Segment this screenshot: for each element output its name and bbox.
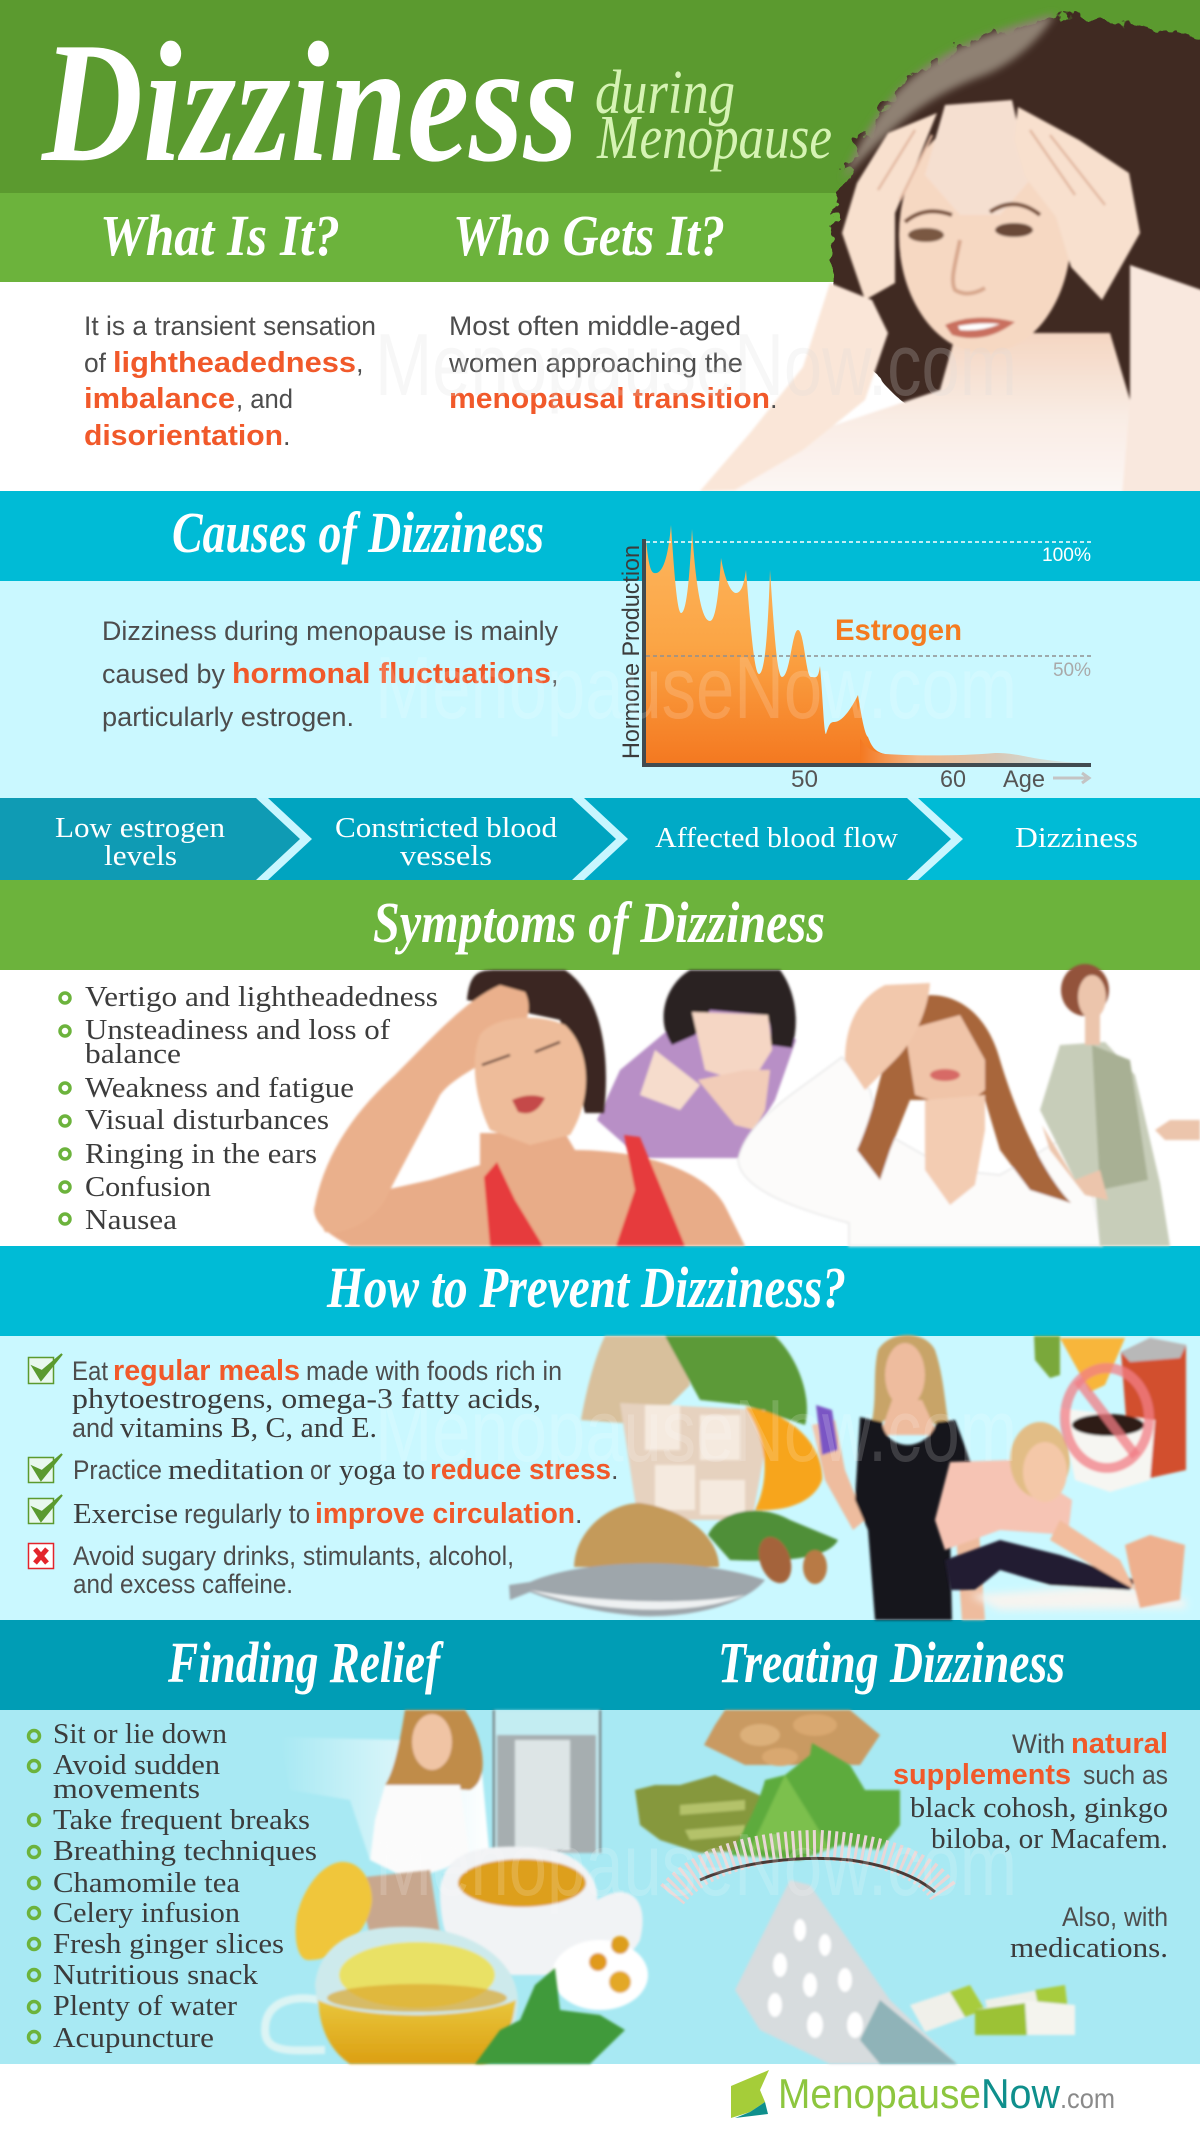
list: prevention: yoga (339, 1454, 396, 1486)
photo: ginger (296, 1862, 444, 1960)
photo: tan supplement tablets (704, 1710, 880, 1766)
logo: Menopause (778, 2070, 981, 2117)
list: finding relief: Acupuncture (53, 2022, 214, 2054)
list: finding relief: Fresh ginger slices (53, 1928, 284, 1960)
text block: treatment: Also, with (1062, 1902, 1168, 1932)
photo: parsley herb (475, 1968, 625, 2064)
photo: blister pack of pills (735, 1880, 957, 2064)
title: during (595, 59, 735, 127)
photo: white cup of tea (440, 1847, 643, 1975)
photo: woman resting in bed (280, 1710, 490, 1880)
list: symptoms: Unsteadiness and loss of (85, 1014, 390, 1046)
chart: estrogen decline (618, 525, 1091, 793)
list: prevention: to (403, 1455, 425, 1485)
text block: who gets it: menopausal transition (449, 383, 770, 415)
photo: woman with raised hand in white shirt (738, 983, 1102, 1246)
list: prevention: reduce stress (430, 1454, 611, 1486)
text block: what is it: , (356, 348, 364, 378)
watermark: MenopauseNow.com (375, 315, 1017, 414)
photo: drinks with prohibition sign (1034, 1336, 1186, 1492)
text block: who gets it (448, 311, 778, 415)
text block: who gets it: women approaching the (448, 348, 743, 378)
list: prevention (28, 1354, 619, 1599)
list: symptoms: Confusion (85, 1171, 212, 1203)
watermark: MenopauseNow.com (375, 1381, 1017, 1480)
text block: causes: Dizziness during menopause is mainly (102, 616, 558, 646)
list: prevention: and (72, 1413, 114, 1443)
photo: chamomile flowers (552, 1936, 648, 2010)
list: finding relief: Avoid sudden (53, 1749, 221, 1781)
chart: estrogen decline: 100% (1042, 545, 1091, 566)
list: prevention: improve circulation (315, 1498, 575, 1530)
list: symptoms: Ringing in the ears (85, 1138, 317, 1170)
text block: who gets it: . (770, 384, 778, 414)
list: finding relief: Breathing techniques (53, 1835, 317, 1867)
text block: causes: particularly estrogen. (102, 702, 354, 732)
text block: what is it: imbalance (84, 383, 235, 415)
text block: treatment (893, 1728, 1168, 1964)
text block: who gets it: Most often middle-aged (449, 311, 741, 341)
text block: treatment: biloba, or Macafem. (931, 1823, 1168, 1855)
text block: causes (102, 616, 559, 732)
photo: glass mug of herbal tea (265, 1927, 518, 2064)
list: finding relief: Nutritious snack (53, 1959, 259, 1991)
chart: estrogen decline: Estrogen (835, 614, 962, 647)
list: prevention: or (310, 1455, 331, 1485)
watermark: MenopauseNow.com (375, 638, 1017, 737)
text block: causes: , (551, 659, 559, 689)
chart: estrogen decline: 50% (1053, 660, 1091, 681)
list: symptoms: Nausea (85, 1204, 177, 1236)
text block: what is it: lightheadedness (113, 347, 356, 379)
text block: what is it: . (283, 421, 291, 451)
list: prevention: regularly to (184, 1499, 310, 1529)
list: prevention: Avoid sugary drinks, stimulants, alcohol, (73, 1541, 514, 1571)
list: prevention: meditation (168, 1454, 305, 1486)
list: finding relief: Plenty of water (53, 1990, 237, 2022)
list: prevention: regular meals (113, 1355, 300, 1387)
photo: glass of water (493, 1710, 600, 1853)
list: finding relief: movements (53, 1773, 200, 1805)
photo: woman in purple (597, 970, 796, 1158)
list: finding relief: Take frequent breaks (53, 1804, 310, 1836)
list: finding relief: Celery infusion (53, 1897, 241, 1929)
photo: woman with hand on forehead in red top (314, 970, 745, 1246)
logo (731, 2070, 1115, 2118)
photo: green capsules (635, 1775, 770, 1853)
text block: treatment: black cohosh, ginkgo (910, 1792, 1168, 1824)
photo: black cohosh flower (672, 1845, 945, 1895)
list: prevention: . (611, 1455, 619, 1485)
list: finding relief: Chamomile tea (53, 1867, 240, 1899)
process arrows: low estrogen to dizziness: Dizziness (1015, 823, 1138, 854)
photo: healthy foods (509, 1336, 838, 1616)
heading: finding relief: Finding Relief (167, 1630, 444, 1695)
text block: what is it: disorientation (84, 420, 283, 452)
text block: what is it (84, 311, 376, 452)
text block: causes: hormonal fluctuations (232, 658, 551, 690)
list: prevention: Practice (73, 1455, 162, 1485)
list: finding relief: Sit or lie down (53, 1718, 227, 1750)
list: finding relief (28, 1718, 317, 2054)
list: symptoms: Vertigo and lightheadedness (85, 981, 438, 1013)
logo: Now (981, 2070, 1061, 2117)
process arrows: low estrogen to dizziness: levels (104, 841, 177, 872)
list: symptoms: Visual disturbances (85, 1104, 329, 1136)
list: symptoms (60, 981, 438, 1236)
list: prevention: Exercise (73, 1498, 178, 1530)
chart: estrogen decline: Age (1003, 766, 1045, 793)
photo: woman stretching (935, 1422, 1186, 1610)
heading: prevent: How to Prevent Dizziness? (326, 1255, 846, 1320)
chart: estrogen decline: Hormone Production (618, 545, 645, 759)
list: prevention: made with foods rich in (306, 1356, 562, 1386)
list: symptoms: balance (85, 1038, 181, 1070)
heading: causes: Causes of Dizziness (172, 500, 544, 565)
title: Menopause (596, 104, 832, 172)
process arrows: low estrogen to dizziness: Constricted blood (335, 813, 557, 844)
text block: treatment: medications. (1010, 1932, 1168, 1964)
photo: ginkgo leaf (730, 1743, 900, 1860)
chart: estrogen decline: 60 (940, 766, 966, 793)
list: prevention: Eat (72, 1356, 108, 1386)
chart: estrogen decline: 50 (791, 766, 818, 793)
text block: treatment: supplements (893, 1759, 1071, 1791)
process arrows: low estrogen to dizziness: Affected blood flow (655, 823, 899, 854)
photo: woman exercising with dumbbells (812, 1335, 985, 1620)
list: prevention: phytoestrogens, omega-3 fatty acids, (72, 1383, 541, 1415)
title: Dizziness (40, 8, 578, 198)
process arrows: low estrogen to dizziness: Low estrogen (55, 813, 225, 844)
heading: what is it: What Is It? (100, 203, 340, 268)
text block: treatment: such as (1083, 1760, 1168, 1790)
band below the top photo (0, 491, 1200, 581)
photo: lime and white capsules (910, 1985, 1075, 2035)
text block: what is it: It is a transient sensation (84, 311, 376, 341)
text block: treatment: With (1012, 1729, 1065, 1759)
list: prevention: and excess caffeine. (73, 1569, 293, 1599)
text block: what is it: of (84, 348, 106, 378)
list: symptoms: Weakness and fatigue (85, 1072, 354, 1104)
heading: symptoms: Symptoms of Dizziness (373, 890, 825, 955)
list: prevention: . (575, 1499, 583, 1529)
logo: .com (1060, 2083, 1115, 2114)
list: prevention: vitamins B, C, and E. (120, 1412, 377, 1444)
text block: causes: caused by (102, 659, 225, 689)
photo: standing woman in grey-green (1040, 964, 1200, 1246)
text block: what is it: , and (236, 384, 293, 414)
heading: who gets it: Who Gets It? (453, 203, 725, 268)
process arrows: low estrogen to dizziness (0, 798, 1200, 880)
process arrows: low estrogen to dizziness: vessels (400, 841, 492, 872)
photo: woman holding her head (700, 14, 1200, 520)
text block: treatment: natural (1071, 1728, 1168, 1760)
heading: treating dizziness: Treating Dizziness (718, 1630, 1065, 1695)
watermark: MenopauseNow.com (375, 1815, 1017, 1914)
